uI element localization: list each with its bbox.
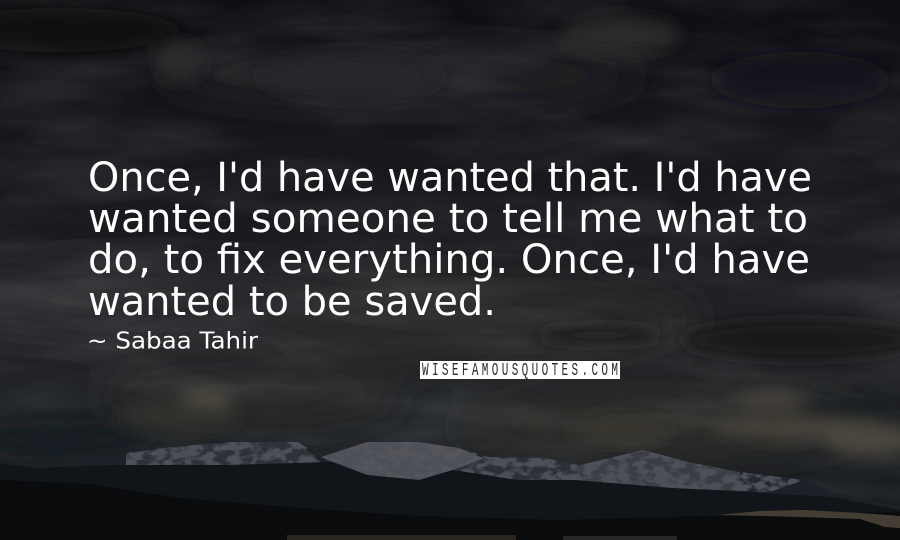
mountains: snowy peaks [126,442,846,496]
quote text: wanted to be saved. [88,278,496,325]
quote text: Once, I'd have wanted that. I'd have [88,154,812,201]
logo: wisefamousquotes.com: WISEFAMOUSQUOTES.COM [422,360,618,381]
attribution: author: ~ Sabaa Tahir [87,328,258,354]
quote text: wanted someone to tell me what to [88,195,808,242]
quote text: do, to fix everything. Once, I'd have [88,236,810,283]
quote text [88,154,812,325]
foreground: dark hills and field [0,462,900,540]
